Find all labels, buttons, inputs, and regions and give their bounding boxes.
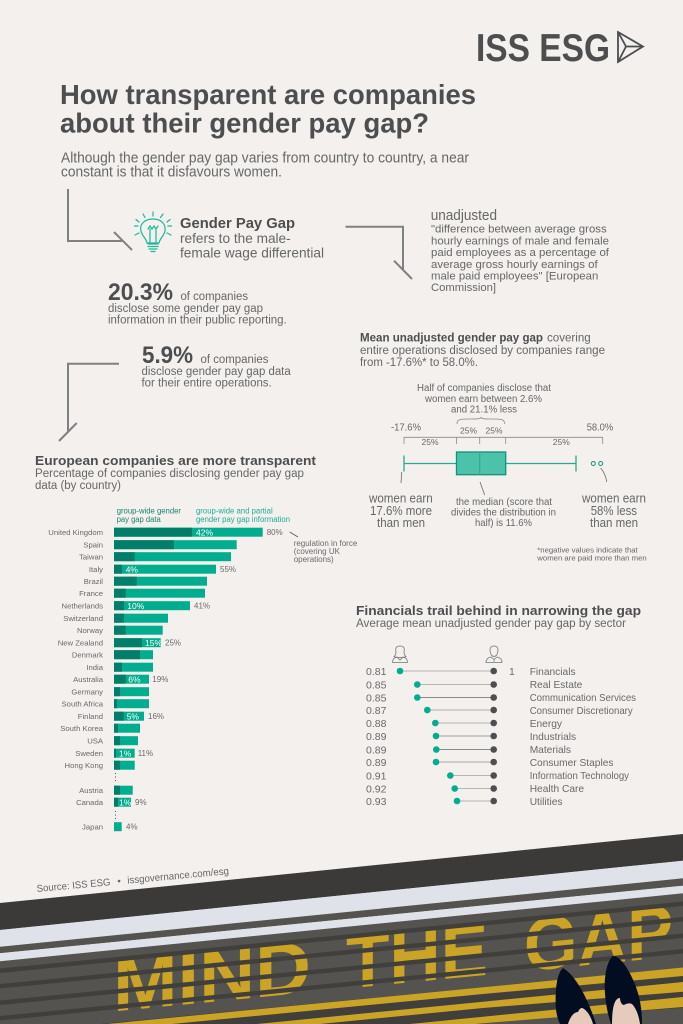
stat: 20.3%: of companies [180,291,248,303]
range scale: 25% [421,437,439,447]
heading: financials: Financials trail behind in narrowing the gap [356,603,641,618]
footnote: *negative values indicate that [537,545,639,554]
row: USA: USA [87,736,104,746]
heading: mean unadjusted gender pay gap: Mean unadjusted gender pay gap [360,333,543,345]
text: half of companies: Half of companies disclose that [417,383,551,394]
box plot [368,383,647,563]
row: Materials: 0.89 [366,744,387,756]
row: Communication Services: 0.85 [366,692,387,704]
row: Finland [78,712,164,722]
leader lines [401,468,607,495]
row: Industrials: Industrials [530,732,576,743]
row: Italy [89,564,236,574]
row: Finland: Finland [78,712,103,721]
row: Real Estate [366,680,583,692]
intro text: Although the gender pay gap varies from country to country, a near [61,150,469,166]
callout: median: half) is 11.6% [475,517,532,529]
row: Brazil: Brazil [84,577,103,586]
row: Consumer Staples: 0.89 [366,757,387,769]
text: unadjusted definition: hourly earnings of male and female [431,236,609,248]
row: Hong Kong: Hong Kong [65,761,103,770]
row: Italy: 55% [220,565,236,574]
row: Norway [77,626,163,635]
row: South Korea: South Korea [60,724,104,733]
callout: women earn more: 17.6% more [370,504,432,518]
row: United Kingdom [48,528,283,538]
row: South Korea [60,724,140,733]
callout: median [451,496,556,529]
text: gender pay gap definition: Gender Pay Gap [180,216,295,232]
row: Taiwan [79,552,231,562]
row: Sweden [75,748,153,758]
ellipsis [114,811,116,819]
row: Japan: Japan [82,822,103,832]
row: Denmark [72,650,153,660]
heading: European companies: European companies are more transparent [35,453,317,468]
row: Norway: Norway [77,626,103,635]
stat: 20.3% [108,279,287,326]
callout: median: the median (score that [456,496,552,508]
row: Consumer Discretionary: 0.87 [366,705,387,717]
row: Health Care: Health Care [530,784,584,795]
stat: 20.3%: information in their public reporting. [108,314,287,326]
row: Utilities [366,796,563,808]
platform: road surface [0,893,683,1024]
row: Materials [366,744,571,756]
row: Germany [71,687,149,696]
heading: financials: Average mean unadjusted gender pay gap by sector [356,618,626,630]
brace [457,418,505,424]
row: Real Estate: Real Estate [530,680,583,691]
callout: regulation in force [290,532,358,564]
row: Consumer Discretionary [366,705,634,717]
platform: light safety band [0,861,683,961]
stat: 20.3%: 20.3% [108,279,173,306]
row: Japan [82,822,138,832]
row: Germany: Germany [71,688,103,696]
row: Industrials: 0.89 [366,731,387,743]
row: Spain [83,540,237,550]
callout: women earn less [581,492,646,530]
range scale: 25% [460,426,477,436]
callout: women earn less: than men [590,516,638,530]
legend: pay gap data [117,515,161,524]
dumbbell chart: pay gap by sector [366,666,636,808]
row: France [79,589,205,598]
row: Real Estate: 0.85 [366,680,387,692]
text: unadjusted definition: unadjusted [431,208,497,224]
text: half of companies [417,383,551,416]
row: Spain: Spain [83,540,103,550]
row: Netherlands: 41% [194,602,210,610]
left shoe [556,968,596,1024]
row: Sweden: 1% [119,748,132,758]
row: United Kingdom: 80% [267,528,283,537]
text: unadjusted definition [431,208,610,294]
row: Canada [76,798,147,808]
row: Energy [366,718,563,730]
row: New Zealand: 15% [145,638,162,648]
row: South Africa [62,699,149,708]
row: Taiwan: Taiwan [79,552,103,562]
row: Energy: Energy [530,719,563,730]
arrow: bracket to European companies [59,364,119,441]
row: Finland: 5% [127,712,139,722]
text: half of companies: and 21.1% less [451,404,517,416]
row: Communication Services: Communication Services [530,693,636,704]
row: Financials: 0.81 [366,666,387,678]
text: MIND THE GAP [113,889,673,1024]
heading: mean unadjusted gender pay gap: from -17.6%* to 58.0%. [360,357,478,369]
legend: gender pay gap information [196,515,290,524]
row: Utilities: Utilities [530,797,563,808]
row: New Zealand: New Zealand [58,638,103,648]
footnote: women are paid more than men [536,554,647,563]
title: How transparent are companies [60,79,476,110]
row: Australia: 6% [128,674,141,684]
row: Italy: 4% [126,564,138,574]
stat: 5.9%: 5.9% [142,342,193,369]
heading: European companies [35,453,317,492]
text: unadjusted definition: male paid employees" [European [431,270,598,282]
illustration: shoes [556,956,642,1024]
arrow: bracket to unadjusted definition [346,227,412,279]
text: MIND THE GAP: GAP [524,889,673,987]
legend: group-wide gender [117,506,181,516]
callout: women earn more: than men [377,516,425,530]
row: Materials: Materials [530,745,571,756]
title: about their gender pay gap? [60,108,429,139]
row: Health Care: 0.92 [366,784,387,796]
stat: 5.9%: disclose gender pay gap data [142,366,291,378]
callout: regulation in force: (covering UK [294,547,341,556]
row: Australia: 19% [152,675,168,684]
row: Financials: Financials [530,667,576,678]
row: Consumer Discretionary: Consumer Discretionary [530,706,634,717]
intro text: constant is that it disfavours women. [61,164,282,180]
logo: ISS ESG: ISS ESG [476,27,610,70]
text: unadjusted definition: paid employees as a percentage of [431,247,610,259]
row: Financials: 1 [509,666,515,678]
row: Communication Services [366,692,636,704]
intro text [61,150,469,180]
row: USA [87,736,138,746]
row: Denmark: Denmark [72,650,103,660]
row: Sweden: 11% [138,749,153,758]
callout: women earn more: women earn [368,492,433,506]
row: Health Care [366,784,584,796]
text: unadjusted definition: Commission] [431,282,496,294]
row: Switzerland [63,614,168,623]
row: Finland: 16% [148,712,164,721]
footnote [536,545,647,563]
source: issgovernance.com/esg [127,866,229,887]
row: Italy: Italy [89,565,103,574]
row: Consumer Staples: Consumer Staples [530,758,614,769]
legend: group-wide and partial [196,506,273,516]
stat: 5.9% [142,342,291,390]
row: Canada: 1% [119,798,132,808]
row: New Zealand: 25% [165,638,181,648]
row: Utilities: 0.93 [366,796,387,808]
arrow: bracket to gender pay gap [68,189,132,250]
right shoe [605,956,642,1024]
title [60,79,476,139]
callout: regulation in force: regulation in force [294,539,358,548]
bar chart: companies disclosing by country [48,528,283,832]
row: France: France [79,589,103,598]
text: gender pay gap definition [180,216,324,261]
row: Japan: 4% [126,822,138,832]
ellipsis [114,773,116,781]
row: Australia [73,674,168,684]
row: India [86,663,153,672]
text: half of companies: women earn between 2.6% [424,394,542,405]
row: Financials [366,666,576,678]
row: Australia: Australia [73,675,104,684]
row: Energy: 0.88 [366,718,387,730]
row: Brazil [84,577,207,586]
row: Netherlands: 10% [127,601,145,611]
range scale: -17.6% [391,422,421,434]
source: Source: ISS ESG [36,877,111,895]
row: India: India [86,663,104,672]
row: Industrials [366,731,576,743]
row: Netherlands [62,601,210,611]
icon: logo arrow [618,32,643,62]
row: Consumer Staples [366,757,614,769]
text: gender pay gap definition: female wage differential [180,245,324,261]
stat: 20.3%: disclose some gender pay gap [108,303,263,315]
platform: dark stripes [0,902,683,1024]
heading: European companies: data (by country) [35,480,121,492]
row: Information Technology: Information Technology [530,771,630,782]
range scale: 25% [553,437,570,447]
callout: median: divides the distribution in [451,506,556,518]
legend [117,506,290,524]
row: New Zealand [58,638,181,648]
callout: women earn more [368,492,433,530]
row: Sweden: Sweden [75,749,103,758]
row: Canada: Canada [76,798,104,807]
text: MIND THE GAP: THE [346,907,488,1005]
icon: woman [392,646,408,662]
stat: 5.9%: for their entire operations. [142,378,272,390]
row: Information Technology: 0.91 [366,770,387,782]
row: Hong Kong [65,761,135,770]
stat: 5.9%: of companies [200,354,269,366]
row: Canada: 9% [135,798,147,807]
heading: mean unadjusted gender pay gap: covering [547,333,591,345]
row: Information Technology [366,770,630,782]
source: • [117,876,122,888]
platform: dark edge [0,834,683,930]
row: South Africa: South Africa [62,700,104,708]
icon: light bulb [134,212,172,252]
callout: regulation in force: operations) [294,555,334,564]
icon: man [486,646,502,662]
gold lines [107,968,683,1024]
source [36,866,229,895]
text: gender pay gap definition: refers to the male- [180,230,291,246]
text: unadjusted definition: "difference between average gross [431,224,607,236]
whisker and box [404,452,603,475]
row: Austria: Austria [79,786,104,795]
callout: women earn less: 58% less [591,504,637,518]
row: Switzerland: Switzerland [63,614,103,623]
callout: women earn less: women earn [581,492,646,506]
heading: financials [356,603,641,630]
row: United Kingdom: United Kingdom [48,528,103,537]
heading: mean unadjusted gender pay gap: entire operations disclosed by companies range [360,345,605,357]
range scale: 58.0% [587,422,613,434]
text: unadjusted definition: average gross hourly earnings of [431,259,599,271]
heading: mean unadjusted gender pay gap [360,333,605,369]
range scale [391,422,613,447]
heading: European companies: Percentage of companies disclosing gender pay gap [35,468,304,480]
row: Austria [79,786,133,795]
row: Netherlands: Netherlands [62,602,103,610]
row: United Kingdom: 42% [196,528,213,538]
range scale: 25% [485,426,503,436]
